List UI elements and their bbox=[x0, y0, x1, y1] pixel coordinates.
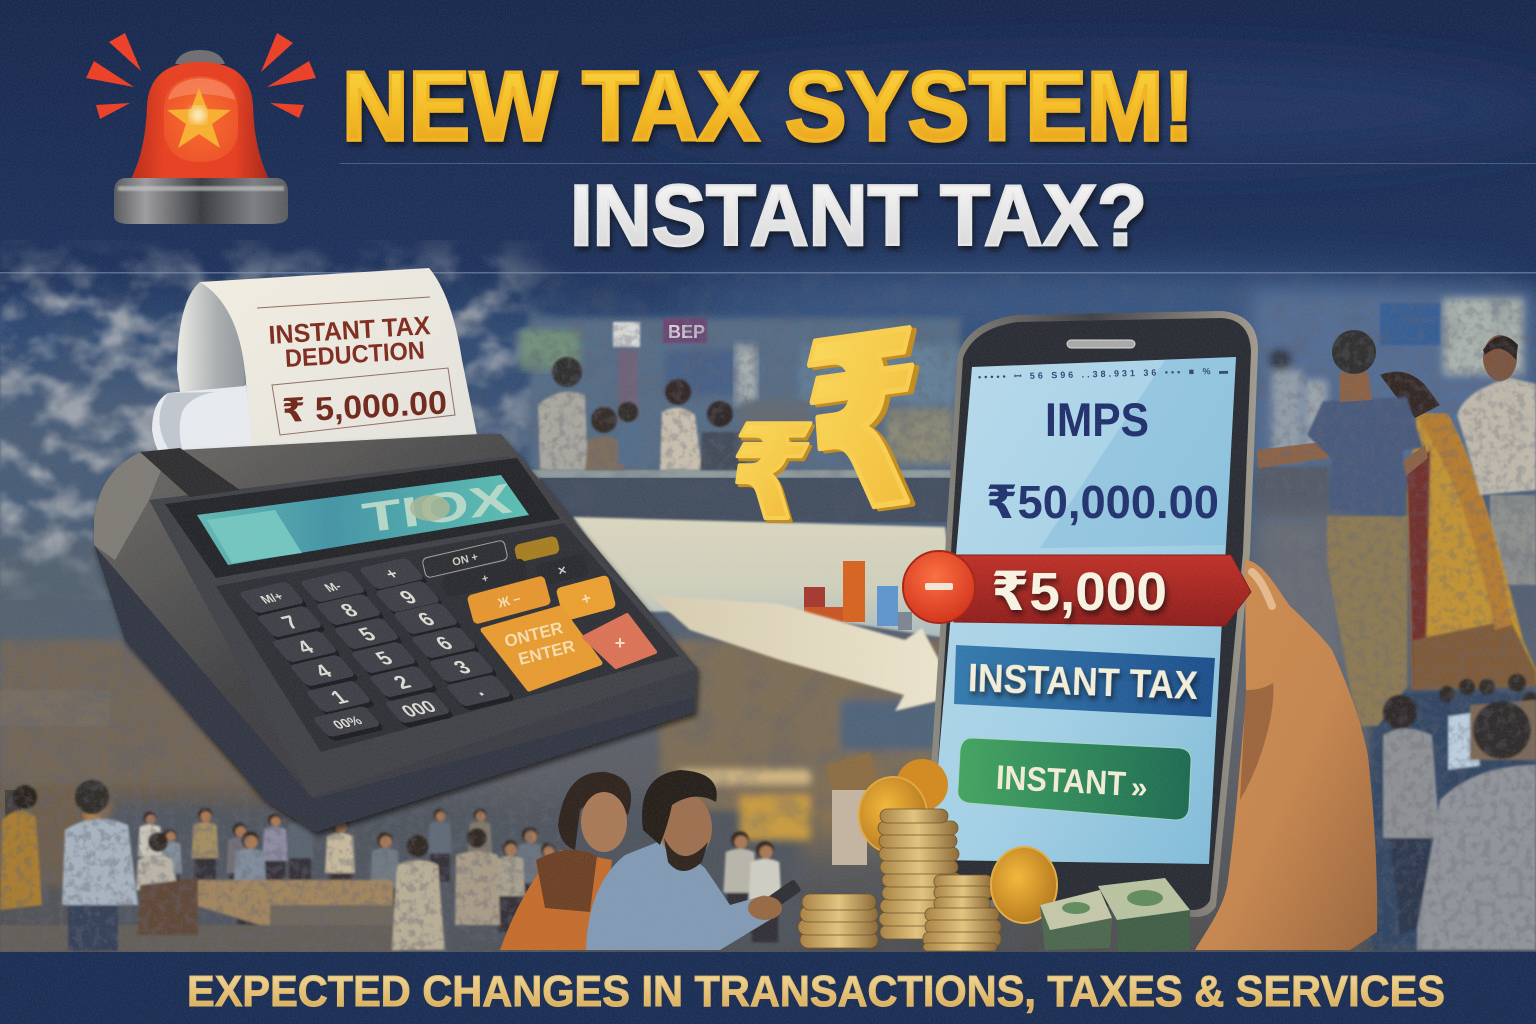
number keys: 3 bbox=[449, 657, 476, 678]
instant green button: INSTANT bbox=[995, 759, 1127, 803]
foreground woman bbox=[500, 772, 631, 950]
phone amount: ₹50,000.00 bbox=[986, 476, 1219, 528]
cash bundle small bbox=[1040, 890, 1112, 950]
man in beige bbox=[455, 828, 500, 925]
subtitle: INSTANT TAX? bbox=[570, 168, 1147, 264]
number keys: 5 bbox=[371, 648, 398, 669]
number keys: 00% bbox=[329, 713, 365, 732]
receipt amount box bbox=[272, 368, 455, 435]
phone screen bbox=[930, 357, 1236, 864]
man in white shirt bbox=[1457, 335, 1536, 495]
small rupee: ₹ bbox=[719, 401, 820, 546]
footer caption: EXPECTED CHANGES IN TRANSACTIONS, TAXES & SERVICES bbox=[187, 967, 1445, 1016]
woman in gold dress bbox=[0, 785, 42, 910]
screen glare bbox=[1040, 357, 1236, 548]
siren base bbox=[114, 178, 288, 224]
phone speaker bbox=[1067, 340, 1135, 348]
receipt heading: INSTANT TAX bbox=[268, 310, 432, 350]
phone shell bbox=[925, 311, 1258, 917]
top function keys: × bbox=[556, 561, 568, 579]
coin and cash pile bbox=[798, 752, 1190, 952]
rupee symbols bbox=[719, 285, 938, 568]
deduction banner bbox=[903, 551, 1251, 626]
instant tax button: INSTANT TAX bbox=[967, 656, 1199, 708]
woman in cream bbox=[392, 835, 445, 950]
minus badge bbox=[903, 551, 975, 623]
instant green button bbox=[958, 738, 1191, 820]
receipt paper bbox=[152, 268, 480, 480]
crowd: lower left market bbox=[0, 780, 782, 952]
mid crowd tone bbox=[100, 800, 800, 950]
orange keys bbox=[466, 575, 655, 689]
right coin stacks bbox=[923, 875, 1001, 951]
number keys: 7 bbox=[277, 612, 304, 633]
market roof lower left bbox=[0, 640, 300, 885]
tall coin stack bbox=[878, 809, 962, 939]
status bar: ••••• ꟷ 56 S96 ..38.931 36 ▪▪▪ ■ % ▬ bbox=[978, 366, 1228, 382]
number keys: 000 bbox=[397, 698, 441, 721]
paper slot bbox=[140, 448, 240, 497]
siren dome bbox=[130, 62, 270, 181]
foreground man with smartphone bbox=[586, 770, 802, 950]
tilted gold coin bbox=[991, 847, 1057, 923]
number keys: 2 bbox=[389, 672, 416, 693]
footer band bbox=[0, 952, 1536, 1024]
market table bbox=[194, 880, 393, 928]
arrow shape bbox=[650, 595, 958, 711]
number keys: 4 bbox=[292, 637, 319, 658]
keypad recess bbox=[216, 523, 679, 752]
number keys: M/+ bbox=[257, 590, 287, 606]
top function keys bbox=[422, 535, 589, 598]
siren rays bbox=[86, 33, 316, 119]
background figures at counter bbox=[1269, 349, 1327, 460]
top function keys: ON + bbox=[451, 551, 479, 569]
instant tax button bbox=[954, 645, 1215, 717]
header rule lines bbox=[0, 163, 1536, 274]
phone bbox=[925, 311, 1258, 917]
woman in sari bbox=[1380, 372, 1536, 690]
receipt heading: DEDUCTION bbox=[284, 336, 426, 373]
crowd: central mall shoppers bbox=[538, 357, 810, 470]
orange keys: Ж – bbox=[495, 590, 522, 611]
mall strip bbox=[520, 318, 960, 522]
display screen: TIOX bbox=[359, 474, 514, 542]
number keys: 5 bbox=[354, 624, 381, 645]
number keys: 4 bbox=[310, 661, 337, 682]
orange keys: ONTER bbox=[503, 618, 565, 651]
cash bundle large bbox=[1098, 878, 1190, 952]
receipt amount box: ₹ 5,000.00 bbox=[281, 383, 448, 429]
man in pale shirt bbox=[62, 780, 138, 951]
orange keys: ENTER bbox=[516, 636, 577, 669]
title: NEW TAX SYSTEM! bbox=[342, 51, 1194, 161]
large rupee: ₹ bbox=[796, 286, 933, 565]
paper front sheet bbox=[200, 268, 480, 480]
hand holding phone bbox=[1195, 560, 1377, 950]
paper curl back bbox=[177, 282, 245, 392]
man in blue shirt bbox=[1257, 330, 1428, 726]
cloud bank left bbox=[0, 60, 1536, 840]
calculator body bbox=[94, 434, 697, 832]
number keys: . bbox=[467, 679, 489, 700]
display bezel bbox=[165, 458, 560, 578]
large coins bbox=[896, 759, 948, 811]
number keys bbox=[238, 557, 516, 742]
mall strip: BEP bbox=[668, 322, 705, 342]
orange keys: + bbox=[580, 590, 593, 609]
orange keys: + bbox=[615, 633, 625, 653]
instant green button: » bbox=[1130, 771, 1148, 805]
number keys: M- bbox=[321, 579, 345, 594]
siren star bbox=[167, 88, 231, 148]
paper roll bbox=[152, 385, 256, 477]
number keys: + bbox=[381, 565, 403, 583]
top function keys: + bbox=[481, 572, 490, 586]
seated figures bbox=[136, 832, 198, 935]
short left coin stack bbox=[798, 894, 878, 948]
number keys: 8 bbox=[336, 600, 363, 621]
right backdrop bbox=[1250, 290, 1536, 952]
calculator face bbox=[149, 456, 697, 797]
arrow: light band from calculator to phone bbox=[573, 517, 960, 711]
siren lens bbox=[164, 76, 238, 162]
large rupee: ₹ bbox=[801, 288, 938, 567]
number keys: 6 bbox=[413, 609, 440, 630]
siren cap bbox=[175, 50, 225, 64]
number keys: 6 bbox=[431, 633, 458, 654]
icon: alarm siren bbox=[86, 33, 316, 224]
number keys: 1 bbox=[326, 687, 353, 708]
calculator bbox=[94, 434, 697, 832]
bar chart bbox=[804, 561, 912, 630]
deduction amount: ₹5,000 bbox=[991, 562, 1167, 622]
small rupee: ₹ bbox=[722, 404, 822, 549]
crowd: right side people bbox=[1257, 330, 1536, 950]
brown note bundle bbox=[826, 752, 882, 865]
receipt heading bbox=[268, 310, 433, 374]
display screen bbox=[197, 474, 529, 565]
number keys: 9 bbox=[395, 587, 422, 608]
phone heading: IMPS bbox=[1045, 393, 1149, 446]
lower right crowd bbox=[1383, 674, 1536, 950]
stalls under arrow bbox=[660, 640, 950, 840]
